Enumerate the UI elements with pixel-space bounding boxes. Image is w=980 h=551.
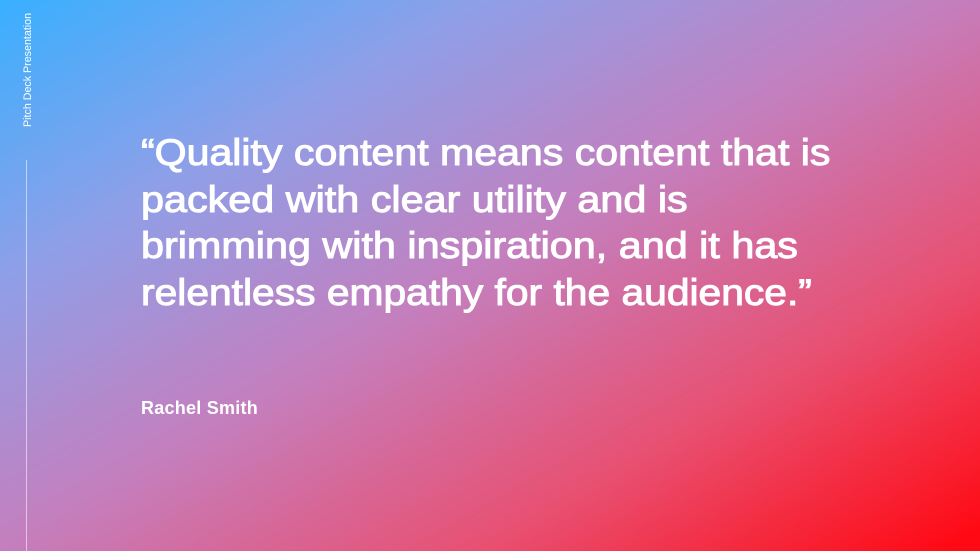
vertical label: Pitch Deck Presentation: Pitch Deck Presentation <box>22 13 34 127</box>
quote text <box>141 132 830 313</box>
quote text: “Quality content means content that is <box>141 132 830 173</box>
vertical rule <box>26 160 27 551</box>
quote text: relentless empathy for the audience.” <box>141 272 812 312</box>
quote text: packed with clear utility and is <box>141 178 688 220</box>
quote author: Rachel Smith <box>141 398 258 418</box>
quote text: brimming with inspiration, and it has <box>141 225 798 266</box>
